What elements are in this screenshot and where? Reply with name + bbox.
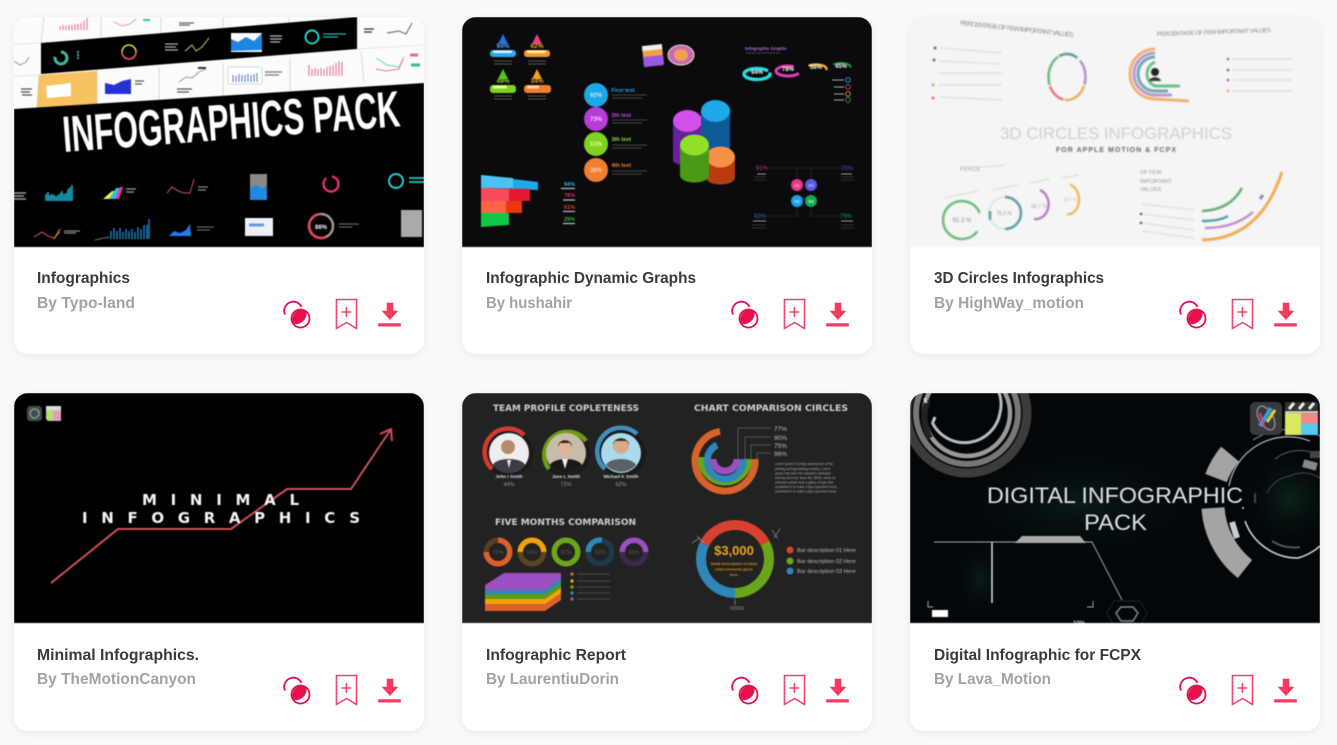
lower row mini charts: 86% (315, 225, 328, 231)
panel headings: TEAM PROFILE COPLETENESS (493, 404, 639, 414)
hexagon diagram: 04 (808, 199, 814, 204)
hexagon diagram: 91% (756, 166, 769, 172)
thumbnail: infographic report: chart elements gives (715, 568, 753, 572)
bubble labels: 4th text (612, 163, 631, 169)
hexagon diagram: 01 (794, 183, 800, 188)
card: Minimal Infographics (14, 393, 424, 731)
thumbnail: infographic report: here (730, 573, 738, 577)
numbered bubbles: 73% (590, 117, 603, 123)
icon: bookmark (1232, 300, 1252, 328)
thumbnail: dynamic graphs: 45% (835, 64, 848, 70)
author: By Typo-land (37, 295, 135, 312)
thumbnail: dynamic graphs (462, 17, 872, 248)
author: By TheMotionCanyon (37, 671, 196, 688)
panel: perspective rings: 58.7 % (1031, 204, 1047, 210)
title: Minimal Infographics. (37, 647, 199, 664)
hexagon diagram: 03 (808, 183, 814, 188)
pyramid percentages: 34% (530, 78, 544, 85)
panel: perspective rings: 32.7 % (1063, 197, 1077, 202)
bubble labels (612, 88, 635, 169)
pyramid percentages: 62% (530, 43, 544, 50)
lower row mini charts (14, 174, 424, 240)
icon: download (378, 303, 401, 326)
donut legend (786, 546, 856, 575)
caption and actions (486, 270, 849, 330)
thumbnail: infographic report: 92% (560, 550, 572, 556)
bar legend: 61% (564, 205, 575, 211)
chart description: scrambled it to make a type specimen book. (775, 485, 837, 489)
rising arrow line (51, 429, 392, 583)
icon: motion circles (284, 678, 310, 704)
chart description: scrambled it to make a type specimen book (775, 490, 837, 494)
thumbnail: digital infographic (910, 393, 1320, 624)
chart leader lines and values: 75% (774, 443, 787, 450)
HUD dial right (1213, 429, 1320, 569)
thumbnail: 3D circles (911, 18, 1319, 246)
icon: download (826, 679, 849, 702)
avatar labels: Michael K Smith (604, 474, 639, 479)
pyramid percentages (490, 34, 551, 93)
thumbnail: infographic report: 53% (526, 550, 538, 556)
pyramid percentages: 94% (496, 43, 510, 50)
top row mini charts (14, 18, 412, 65)
numbered bubbles: 38% (590, 168, 603, 174)
avatar labels: John I Smith (496, 474, 523, 479)
pyramid percentages: 49% (496, 78, 510, 85)
third row mini charts (21, 55, 420, 95)
card: Digital Infographic for FCPX (910, 393, 1320, 731)
thumbnail: infographic report: Small description of ideas (710, 562, 758, 566)
thumbnail: dynamic graphs: 94% (751, 70, 764, 76)
thumbnail: infographic report (462, 393, 872, 624)
thumbnail: infographic report: 33% (594, 550, 606, 556)
headline: MINIMAL (142, 491, 299, 509)
HUD frame lower left (928, 536, 1147, 626)
title: Infographic Dynamic Graphs (486, 270, 696, 287)
author: By HighWay_motion (934, 295, 1084, 312)
icon: motion circles (732, 302, 758, 328)
bubble labels: 2th text (612, 113, 631, 119)
icon: download (378, 679, 401, 702)
concentric rings top left (907, 353, 1027, 473)
icon: bookmark (1232, 676, 1252, 704)
title: Digital Infographic for FCPX (934, 647, 1141, 664)
card: Infographic Dynamic Graphs (462, 17, 872, 354)
bubble labels: First text (612, 88, 635, 94)
headline: DIGITAL INFOGRAPHIC (987, 483, 1243, 508)
thumbnail: minimal infographics (14, 393, 424, 624)
title: Infographic Report (486, 647, 627, 664)
panel: perspective rings (943, 165, 1079, 239)
author: By Lava_Motion (934, 671, 1051, 688)
avatar labels: 44% (503, 482, 515, 488)
panel: sweeping arcs: OF FEW (1140, 170, 1162, 176)
donut legend: Bar description 03 Here (797, 569, 856, 575)
chart description: printing and typesetting industry. Lorem (775, 467, 831, 471)
chart description: Lorem Ipsum is simply dummy text of the (775, 462, 833, 466)
icon: download (1274, 303, 1297, 326)
panel: concentric half rings (1130, 28, 1292, 101)
card: Infographics (14, 17, 424, 354)
hexagon diagram: 75% (840, 214, 853, 220)
bar legend: 78% (564, 193, 575, 199)
panel: ring with list: PERCENTAGE OF FEW IMPORTANT VALUES (960, 20, 1075, 39)
caption and actions (934, 647, 1297, 706)
headline: INFOGRAPHICS (82, 509, 360, 527)
bar legend: 29% (564, 217, 575, 223)
app icons (1250, 402, 1318, 435)
donut legend: Bar description 02 Here (797, 559, 856, 565)
chart leader lines and values (738, 426, 787, 459)
concentric comparison chart (695, 431, 755, 491)
thumbnail: infographic report: 43% (628, 550, 640, 556)
icon: motion circles (1180, 678, 1206, 704)
numbered bubbles: 51% (590, 142, 603, 148)
team avatars (485, 428, 646, 477)
panel: perspective rings: 91.3 % (953, 218, 972, 224)
panel: perspective rings: PERCE (960, 167, 981, 173)
caption and actions (934, 270, 1297, 330)
icon: motion circles (732, 678, 758, 704)
icon: motion circles (1180, 302, 1206, 328)
chart description: Ipsum has been the industry's standard (775, 472, 831, 476)
avatar labels: 62% (615, 482, 627, 488)
icon: bookmark (336, 676, 356, 704)
panel headings: CHART COMPARISON CIRCLES (694, 404, 848, 414)
bar legend: 94% (564, 182, 575, 188)
chart description (775, 462, 837, 494)
avatar labels: 72% (560, 482, 572, 488)
card: 3D Circles Infographics (910, 17, 1320, 354)
subheading: FOR APPLE MOTION & FCPX (1056, 147, 1176, 154)
panel headings: FIVE MONTHS COMPARISON (495, 518, 636, 528)
app icons (642, 44, 694, 67)
numbered bubbles (584, 83, 608, 182)
donut legend: Bar description 01 Here (797, 548, 856, 554)
chart leader lines and values: 96% (774, 451, 787, 458)
icon: motion circles (284, 302, 310, 328)
heading: arcs: Infographic Graphs (745, 46, 787, 51)
panel: ring with list (932, 20, 1086, 100)
caption and actions (486, 647, 849, 706)
donut callouts (692, 529, 780, 609)
avatar labels (496, 474, 639, 488)
revenue donut (701, 525, 769, 593)
title: 3D Circles Infographics (934, 270, 1104, 287)
caption and actions (37, 647, 401, 706)
layer legend (570, 572, 610, 601)
numbered bubbles: 92% (590, 93, 603, 99)
panel: sweeping arcs: VALUES (1140, 187, 1162, 193)
hexagon diagram: 25% (841, 166, 854, 172)
icon: bookmark (336, 300, 356, 328)
caption and actions (37, 270, 401, 330)
headline: PACK (1084, 510, 1147, 535)
thumbnail: dynamic graphs: 78% (782, 67, 795, 73)
hexagon diagram: 82% (754, 214, 767, 220)
headline (987, 483, 1243, 535)
icon: bookmark (784, 676, 804, 704)
arc gauges (744, 63, 850, 80)
panel: concentric half rings: PERCENTAGE OF FEW IMPORTANT VALUES (1157, 28, 1271, 38)
bubble labels: 3th text (612, 137, 631, 143)
title: Infographics (37, 270, 130, 287)
author: By hushahir (486, 295, 572, 312)
hexagon diagram (754, 166, 854, 220)
icon: download (826, 303, 849, 326)
bar legend (564, 182, 575, 223)
headline (82, 491, 360, 527)
five month rings (486, 540, 646, 564)
thumbnail: dynamic graphs: 56% (810, 65, 823, 71)
stacked layers (485, 573, 561, 611)
3D horizontal bars (481, 175, 538, 227)
chart description: dummy text ever since the 1500s, when an (775, 476, 836, 480)
panel: sweeping arcs (1140, 170, 1282, 240)
avatar labels: Jane L Smith (552, 474, 580, 479)
3D cylinders (673, 100, 735, 184)
panel: sweeping arcs: IMPORTANT (1140, 179, 1173, 185)
chart leader lines and values: 77% (774, 426, 787, 433)
chart description: unknown printer took a galley of type and (775, 480, 833, 484)
hexagon diagram: 02 (794, 199, 800, 204)
icon: bookmark (784, 300, 804, 328)
thumbnail: infographics pack (14, 17, 424, 248)
headline: 3D CIRCLES INFOGRAPHICS (1000, 124, 1232, 143)
panel headings (493, 404, 848, 528)
panel: perspective rings: 76.2 % (996, 211, 1012, 217)
chart leader lines and values: 90% (774, 435, 787, 442)
card: Infographic Report (462, 393, 872, 731)
app icons (27, 406, 61, 421)
icon: download (1274, 679, 1297, 702)
donut value: $3,000 (714, 543, 754, 558)
author: By LaurentiuDorin (486, 671, 619, 688)
thumbnail: infographic report: 73% (492, 550, 504, 556)
